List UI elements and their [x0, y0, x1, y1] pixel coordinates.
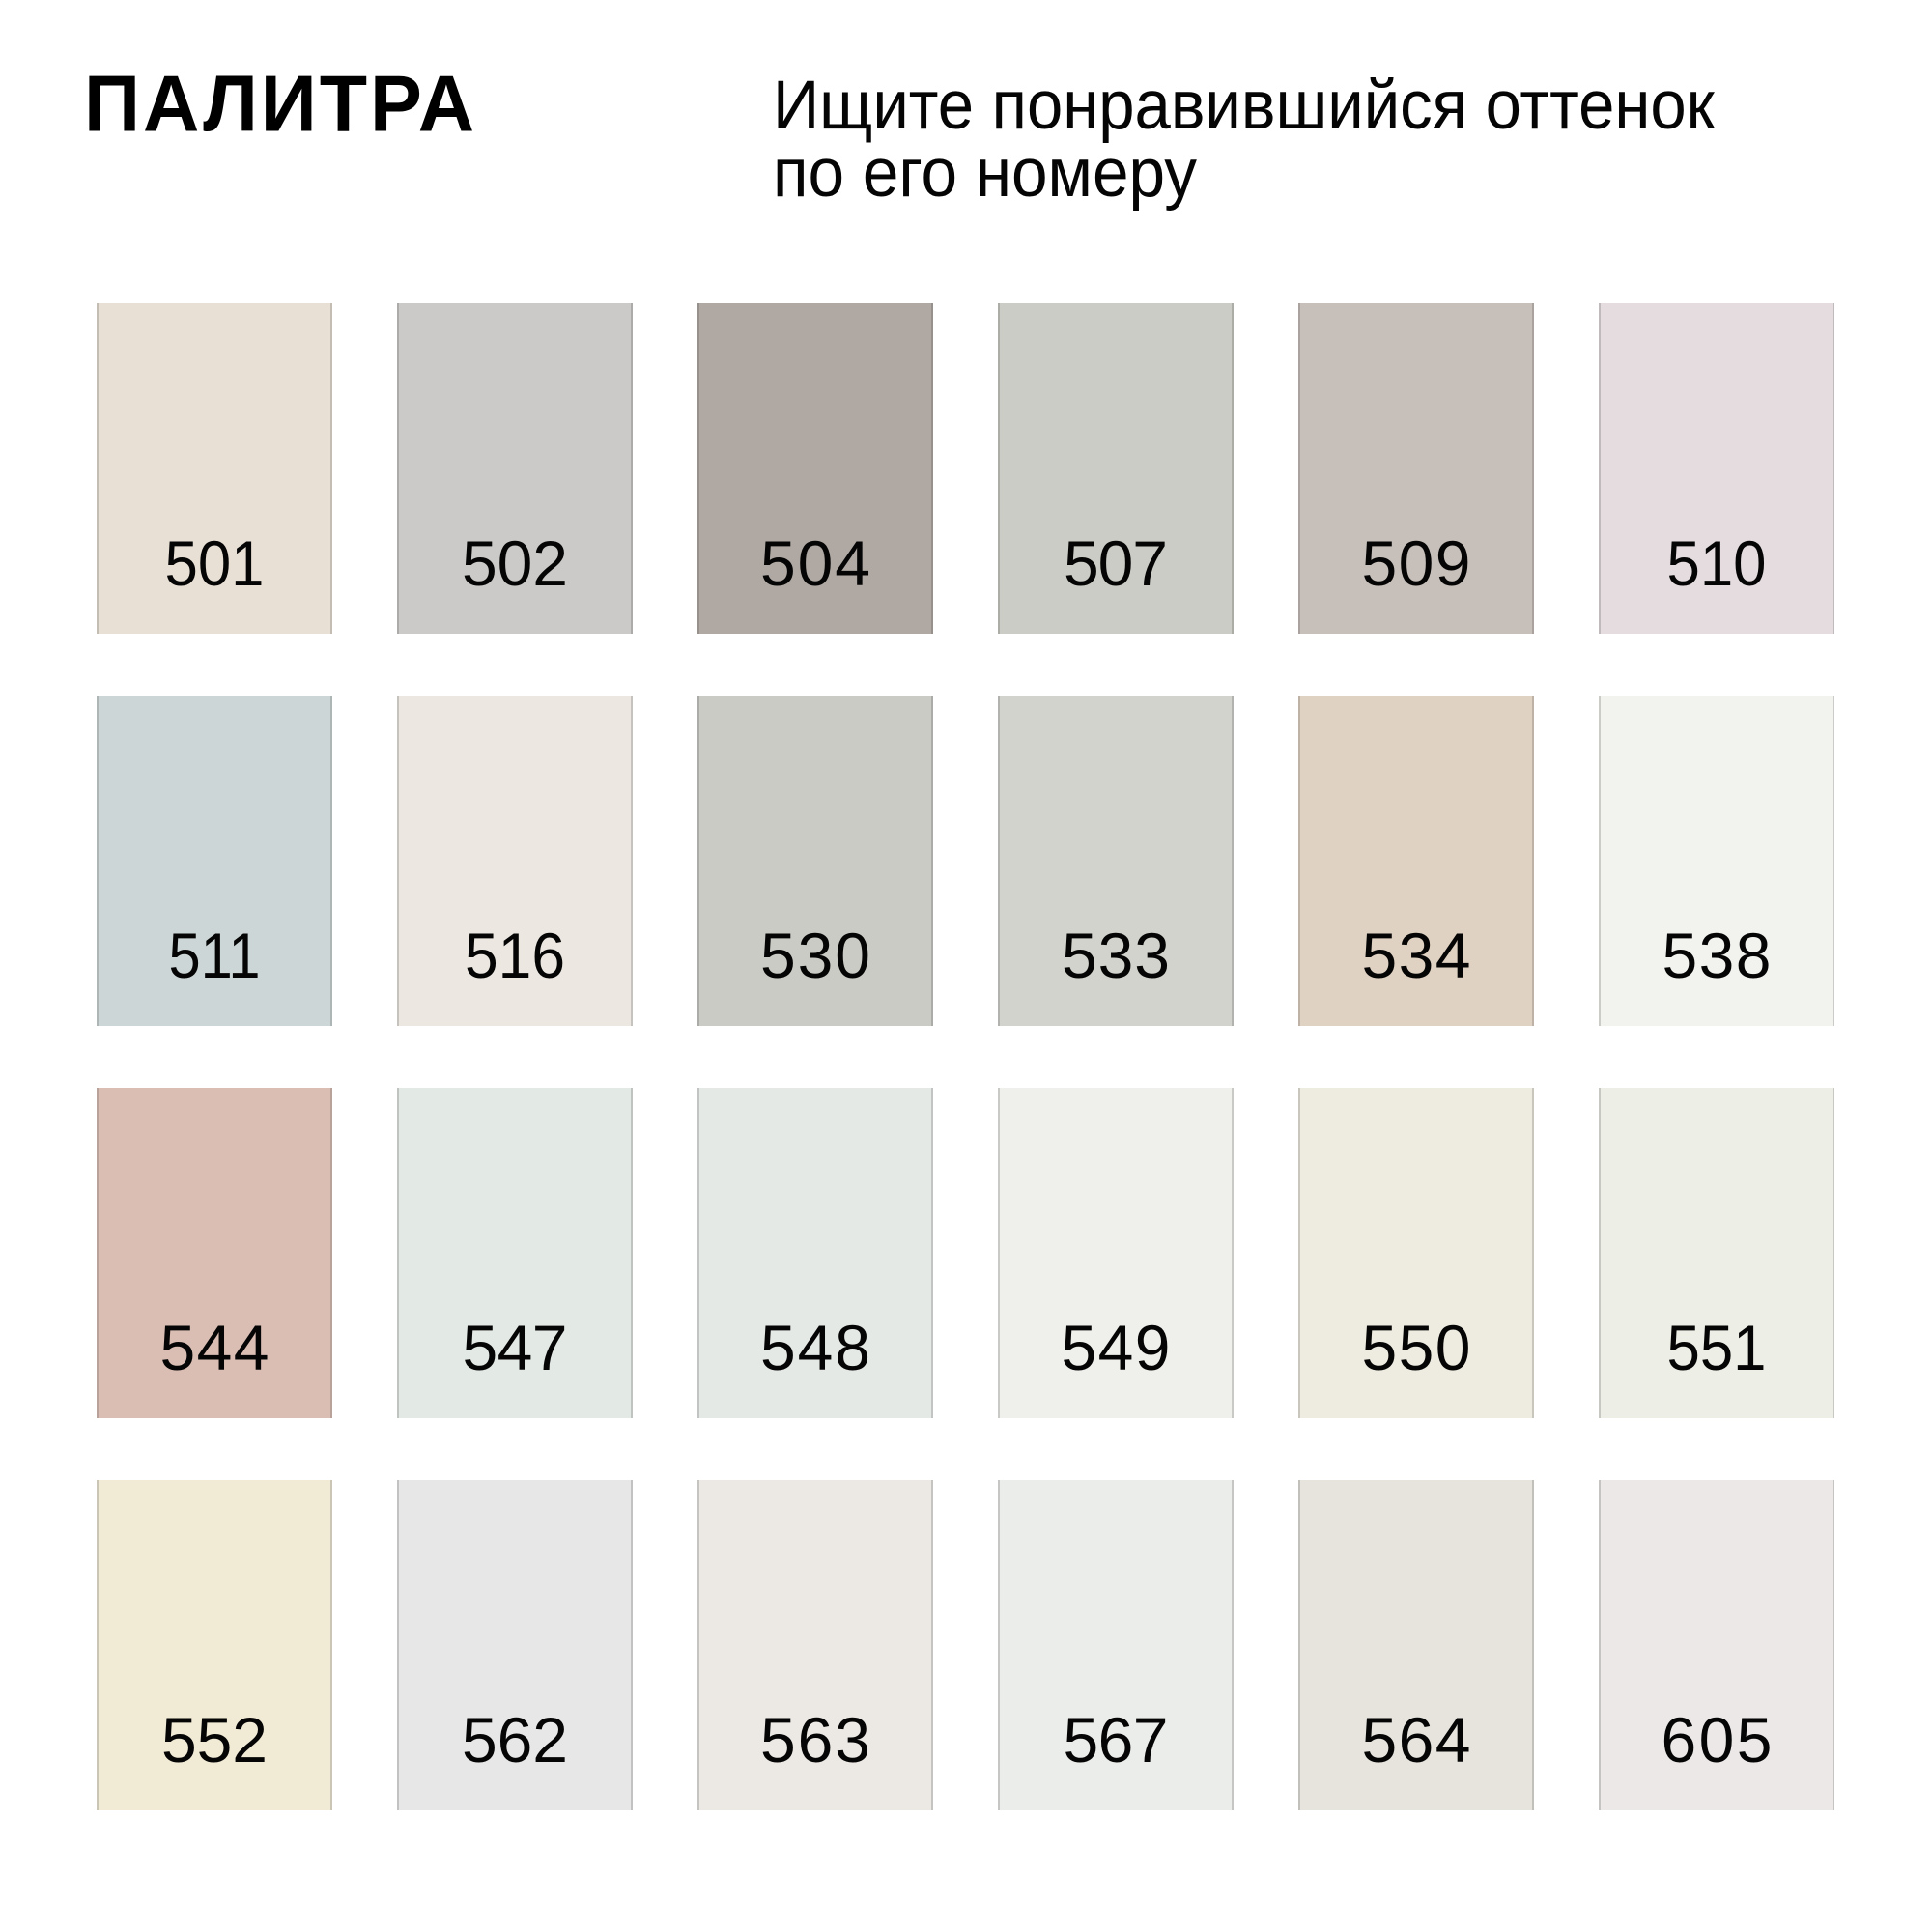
swatch 511: 511	[168, 920, 261, 991]
swatch 550: 550	[1362, 1312, 1470, 1383]
swatch 510	[1599, 303, 1834, 634]
swatch 510: 510	[1667, 527, 1766, 599]
swatch 516: 516	[465, 920, 565, 991]
swatch 534	[1298, 696, 1534, 1026]
swatch 548: 548	[760, 1312, 870, 1383]
swatch 548	[697, 1088, 933, 1418]
swatch 504	[697, 303, 933, 634]
swatch 530: 530	[760, 920, 870, 991]
swatch 549: 549	[1061, 1312, 1171, 1383]
swatch 562	[397, 1480, 633, 1810]
swatch 509: 509	[1362, 527, 1470, 599]
swatch 501: 501	[164, 527, 265, 599]
swatch 538	[1599, 696, 1834, 1026]
swatch 567	[998, 1480, 1234, 1810]
swatch 552: 552	[161, 1704, 268, 1776]
swatch 547: 547	[462, 1312, 568, 1383]
swatch 551	[1599, 1088, 1834, 1418]
swatch 502	[397, 303, 633, 634]
swatch 605	[1599, 1480, 1834, 1810]
swatch 533: 533	[1062, 920, 1170, 991]
swatch 550	[1298, 1088, 1534, 1418]
swatch 530	[697, 696, 933, 1026]
swatch 551: 551	[1667, 1312, 1766, 1383]
swatch 534: 534	[1362, 920, 1470, 991]
swatch 563: 563	[760, 1704, 870, 1776]
swatch 567: 567	[1063, 1704, 1169, 1776]
subtitle text block: Ищите понравившийся оттенок	[773, 68, 1716, 144]
swatch 544	[97, 1088, 332, 1418]
subtitle text block: по его номеру	[773, 135, 1197, 212]
swatch 501	[97, 303, 332, 634]
swatch 511	[97, 696, 332, 1026]
swatch 547	[397, 1088, 633, 1418]
swatch 504: 504	[760, 527, 870, 599]
swatch 516	[397, 696, 633, 1026]
swatch 509	[1298, 303, 1534, 634]
swatch 563	[697, 1480, 933, 1810]
swatch 549	[998, 1088, 1234, 1418]
swatch 502: 502	[462, 527, 568, 599]
swatch 533	[998, 696, 1234, 1026]
swatch 552	[97, 1480, 332, 1810]
swatch 507: 507	[1064, 527, 1168, 599]
swatch 538: 538	[1662, 920, 1772, 991]
swatch 507	[998, 303, 1234, 634]
subtitle text block	[773, 68, 1716, 212]
title: ПАЛИТРА	[84, 58, 477, 149]
swatch 544: 544	[160, 1312, 269, 1383]
swatch 564: 564	[1362, 1704, 1470, 1776]
swatch 605: 605	[1662, 1704, 1772, 1776]
swatch 564	[1298, 1480, 1534, 1810]
swatch 562: 562	[462, 1704, 568, 1776]
